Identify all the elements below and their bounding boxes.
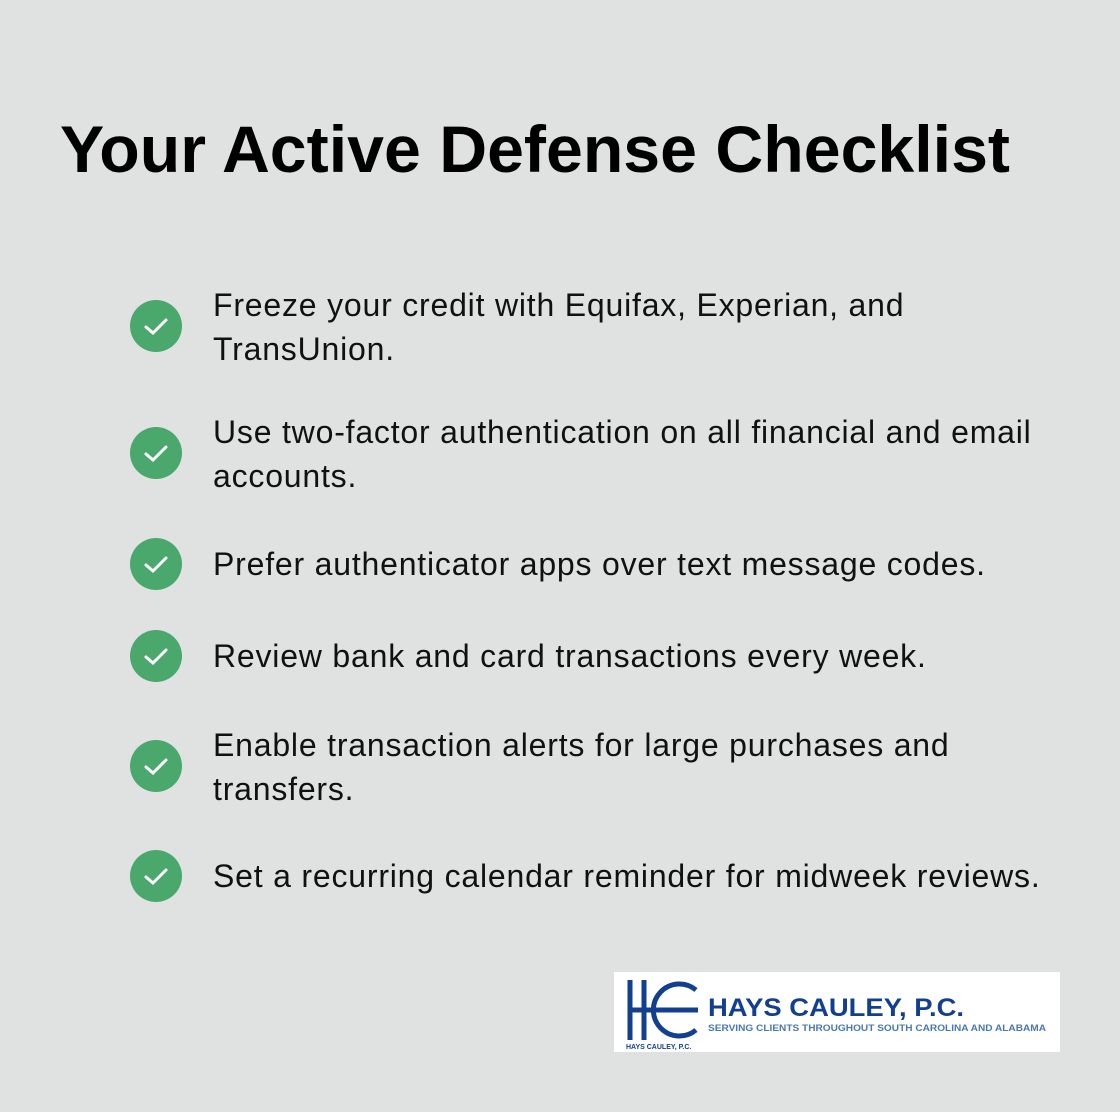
title: Your Active Defense Checklist [60,112,1010,186]
text: transfers. [213,771,354,807]
text: TransUnion. [213,331,395,367]
logo mark [630,980,698,1040]
text: Enable transaction alerts for large purchases and [213,727,950,763]
icon: check [130,538,182,590]
logo: HAYS CAULEY, P.C. [626,1044,691,1051]
text: Review bank and card transactions every week. [213,638,927,674]
item 6 [130,850,1041,902]
logo text: HAYS CAULEY, P.C. [708,994,964,1022]
icon: check [130,740,182,792]
item 1 [130,287,904,367]
text: accounts. [213,458,357,494]
logo: SERVING CLIENTS THROUGHOUT SOUTH CAROLINA AND ALABAMA [708,1023,1047,1033]
text [213,287,904,367]
text [213,727,950,807]
item 4 [130,630,927,682]
icon: check [130,850,182,902]
item 5 [130,727,950,807]
text: Freeze your credit with Equifax, Experian, and [213,287,904,323]
text [213,414,1032,494]
icon: check [130,427,182,479]
icon: check [130,630,182,682]
item 3 [130,538,986,590]
icon: check [130,300,182,352]
logo [614,972,1060,1052]
text: Prefer authenticator apps over text message codes. [213,546,986,582]
text: Use two-factor authentication on all financial and email [213,414,1032,450]
item 2 [130,414,1032,494]
text: Set a recurring calendar reminder for midweek reviews. [213,858,1041,894]
